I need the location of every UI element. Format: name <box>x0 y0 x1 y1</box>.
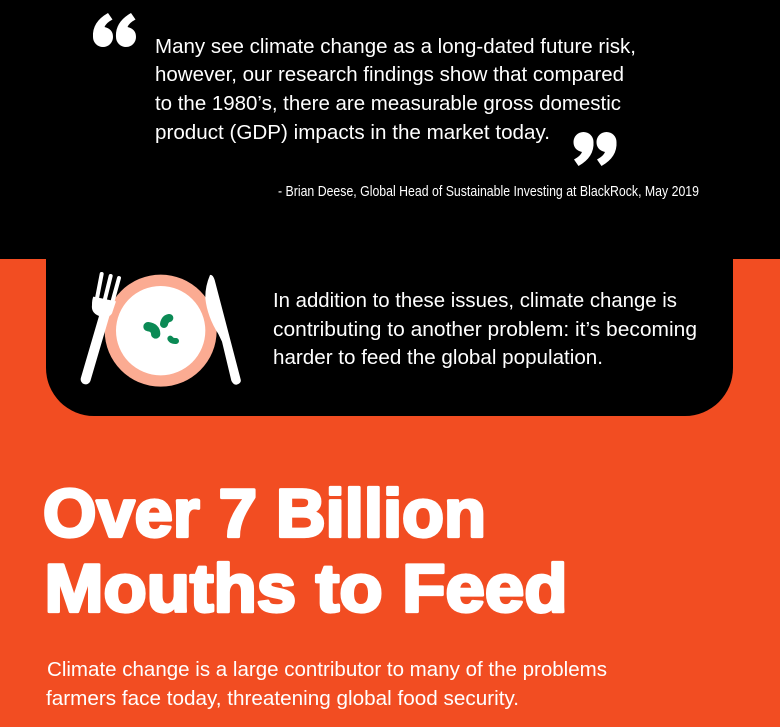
callout text: harder to feed the global population. <box>273 346 603 369</box>
callout text <box>273 289 697 369</box>
panel: black quote band <box>0 0 780 259</box>
body text <box>46 658 607 710</box>
quote text: however, our research findings show that compared <box>155 63 624 86</box>
heading: Mouths to Feed <box>44 552 568 626</box>
quote attribution: - Brian Deese, Global Head of Sustainable Investing at BlackRock, May 2019 <box>278 183 699 200</box>
quote text: to the 1980’s, there are measurable gross domestic <box>155 92 621 115</box>
icon: closing quotation mark <box>574 132 617 166</box>
callout text: contributing to another problem: it’s becoming <box>273 318 697 341</box>
icon: opening quotation mark <box>93 13 136 47</box>
quote text <box>155 35 636 144</box>
quote text: product (GDP) impacts in the market today. <box>155 121 550 144</box>
callout text: In addition to these issues, climate change is <box>273 289 677 312</box>
body text: Climate change is a large contributor to many of the problems <box>47 658 607 681</box>
heading: Over 7 Billion <box>43 476 486 552</box>
quote text: Many see climate change as a long-dated future risk, <box>155 35 636 58</box>
body text: farmers face today, threatening global food security. <box>46 687 519 710</box>
panel: black food callout <box>46 259 733 416</box>
icon: plate with fork and knife <box>86 274 241 387</box>
heading <box>43 476 568 626</box>
